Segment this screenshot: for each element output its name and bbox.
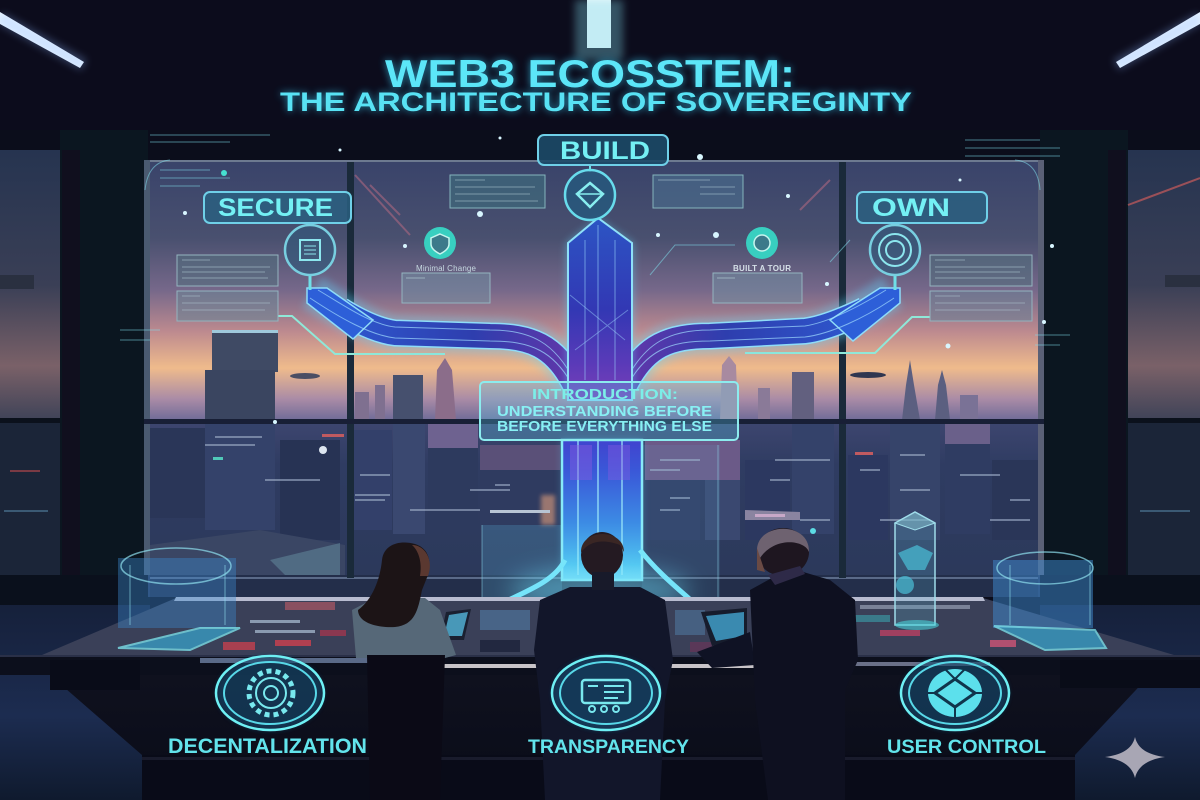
panel: info box left lower [177,291,278,321]
callout: introduction [480,382,738,440]
person: woman with tablet [352,543,471,800]
title: THE ARCHITECTURE OF SOVEREGINTY [280,87,912,117]
heading: build tag [538,135,668,165]
ceiling lights [0,0,1200,68]
icon: right badge [746,227,778,259]
panel: info box right lower [930,291,1032,321]
hologram: glass tube [895,512,939,630]
icon: build node [565,165,615,220]
holographic data lines [120,135,1070,345]
panel: info box left upper [177,255,278,286]
icon: decentralization badge [216,655,324,731]
side window: right [1128,150,1200,575]
label: small left caption: Minimal Change [416,264,477,273]
hologram: left pad and cylinder [118,548,240,650]
window frame mullions [144,160,1044,578]
floor [0,605,1200,800]
icon: secure node [285,225,335,290]
title [280,53,912,117]
person: central man [534,532,673,800]
callout: introduction: UNDERSTANDING BEFORE [497,403,712,420]
callout: introduction: BEFORE EVERYTHING ELSE [497,418,712,435]
label: transparency: TRANSPARENCY [528,737,689,758]
side window: left [0,150,60,575]
label: decentralization: DECENTALIZATION [168,735,367,758]
panel: info box centre left upper [450,175,545,208]
control table [0,597,1200,800]
title: THE ARCHITECTURE OF SOVEREGINTY [280,87,912,117]
callout: introduction: INTRODUCTION: [532,386,678,403]
label: small right caption: BUILT A TOUR [733,264,791,273]
thin teal connector: right [745,317,930,353]
icon: own node [870,225,920,290]
icon: user control badge [901,655,1009,731]
heading: own tag: OWN [872,194,950,222]
label: user control: USER CONTROL [887,737,1046,758]
panel: info box right upper [930,255,1032,286]
heading: secure tag [204,192,351,223]
panel: info box centre right lower [713,273,802,303]
holographic stars [183,136,1054,424]
icon: sparkle watermark [1105,737,1165,778]
panel: info box centre right upper [653,175,743,208]
icon: transparency badge [552,655,660,731]
main window: skyline view [148,160,1040,597]
icon: left shield [424,227,456,259]
person: older man with tablet [697,528,858,800]
hologram: right pad and cylinder [993,552,1106,650]
central tree: branches and trunk [307,218,900,612]
heading: own tag [857,192,987,223]
heading: secure tag: SECURE [218,194,333,222]
title: WEB3 ECOSSTEM: [385,53,795,96]
thin teal connector: left [278,316,445,354]
panel: info box centre left lower [402,273,490,303]
heading: build tag: BUILD [560,137,650,165]
title: WEB3 ECOSSTEM: [385,53,795,96]
